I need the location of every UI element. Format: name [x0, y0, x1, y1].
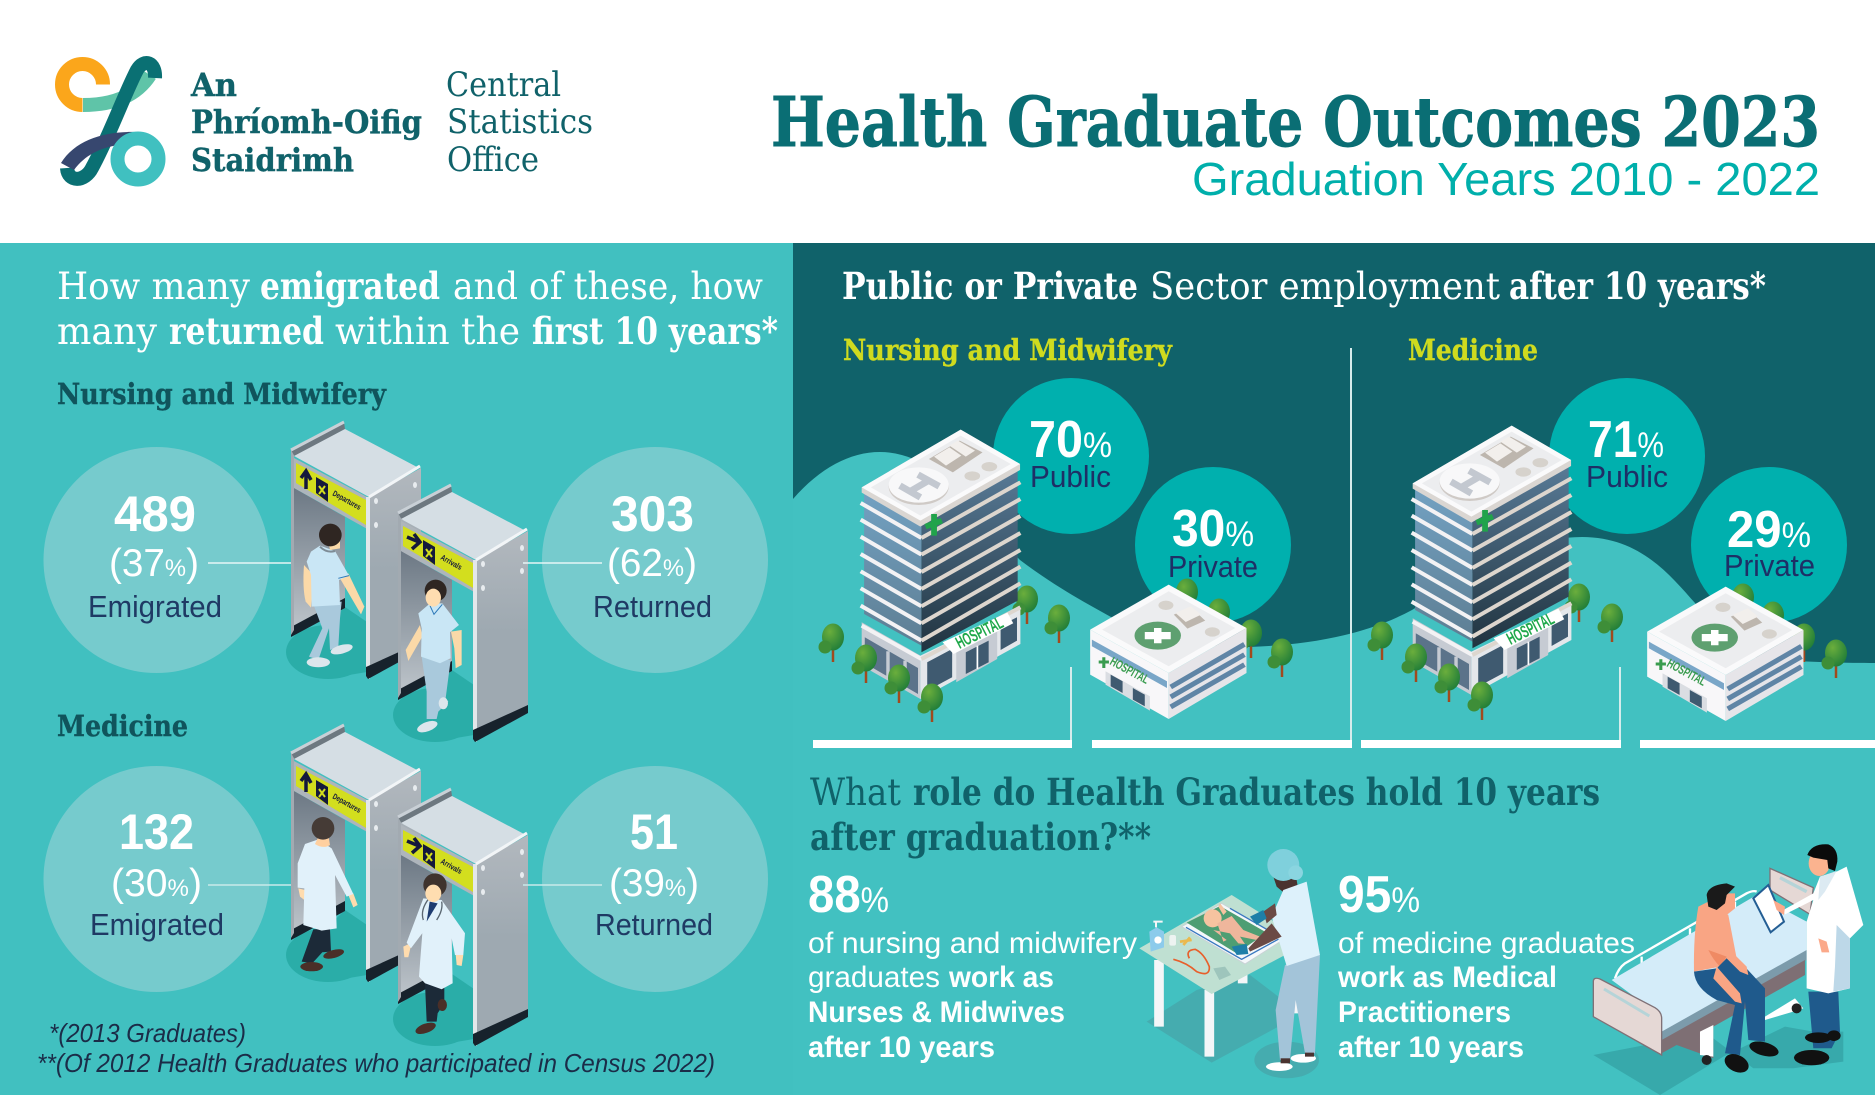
stat: 88% nursing role: Nurses & Midwives	[808, 996, 1065, 1029]
stat: nursing returned: 303	[611, 486, 694, 542]
logo text Irish: Staidrimh	[191, 141, 354, 179]
panel: public or private	[793, 243, 1875, 1095]
heading: roles: role do Health Graduates hold 10 years	[913, 770, 1600, 814]
stat: 95% medicine role: Practitioners	[1338, 996, 1511, 1029]
illustration: nursing private hospital	[1090, 578, 1293, 719]
subheading: nursing and midwifery: Nursing and Midwifery	[57, 377, 387, 411]
stat: 88% nursing role: of nursing and midwifery	[808, 927, 1137, 960]
illustration: doctor with patient on bed	[1593, 844, 1863, 1095]
logo text English: Office	[447, 140, 539, 180]
stat: medicine private: Private	[1724, 548, 1815, 583]
bars and dividers	[1071, 348, 1620, 747]
stat: medicine returned: 51	[630, 804, 678, 860]
figure: doctor arriving	[403, 873, 465, 1036]
stat: medicine public: 71%	[1588, 411, 1664, 469]
stat: medicine emigrated: (30%)	[111, 862, 202, 905]
heading: public or private: Public or Private	[842, 264, 1138, 308]
illustration: nursing arrivals gate: Arrivals	[439, 553, 464, 572]
illustration: nursing hospital tower	[818, 430, 1070, 722]
stat: 95% medicine role	[1337, 866, 1635, 1064]
logo text Irish: Phríomh-Oifig	[191, 103, 422, 141]
stat: 95% medicine role: work as Medical	[1337, 961, 1557, 994]
stat: 88% nursing role: after 10 years	[808, 1031, 995, 1064]
subheading: medicine: Medicine	[57, 709, 188, 743]
stat: 95% medicine role: after 10 years	[1338, 1031, 1524, 1064]
stat: nursing emigrated: 489	[114, 486, 196, 542]
logo mark	[61, 63, 158, 180]
heading: emigration: first 10 years*	[532, 309, 778, 353]
stat: 95% medicine role: of medicine graduates	[1338, 927, 1635, 960]
figure: nurse arriving	[406, 580, 462, 735]
stat: nursing emigrated: Emigrated	[88, 589, 222, 624]
stat: medicine private: 29%	[1727, 501, 1811, 559]
illustration: nursing arrivals gate	[393, 485, 528, 742]
illustration: medicine arrivals gate	[393, 789, 528, 1046]
heading: emigration: How many	[57, 265, 250, 308]
stat: nursing public: Public	[1030, 459, 1111, 494]
stat: nursing public	[993, 378, 1149, 534]
figure: doctor walking away	[298, 817, 358, 971]
stat: medicine returned: Returned	[595, 907, 713, 942]
stat: 88% nursing role: work as	[948, 961, 1054, 994]
heading: emigration: emigrated	[260, 264, 440, 308]
stat: medicine emigrated: Emigrated	[90, 907, 224, 942]
stat: nursing returned	[542, 447, 768, 673]
stat: nursing private	[1135, 467, 1291, 623]
stat: nursing private: Private	[1168, 549, 1258, 584]
illustration: midwife with newborn	[1139, 849, 1320, 1078]
stat: medicine public: Public	[1586, 459, 1668, 494]
stat: nursing emigrated	[44, 447, 270, 673]
stat: nursing public: 70%	[1029, 411, 1112, 469]
stat: nursing returned: Returned	[593, 589, 712, 624]
heading: emigration: and of these, how	[453, 265, 763, 308]
logo text English: Statistics	[447, 102, 593, 142]
illustration: nursing departures gate	[286, 422, 421, 679]
logo text English: Central	[446, 65, 561, 105]
stat: 88% nursing role	[808, 866, 1137, 1064]
heading: emigration: within the	[335, 310, 520, 353]
illustration: medicine arrivals gate: Arrivals	[439, 857, 464, 876]
stat: nursing emigrated: (37%)	[109, 542, 199, 585]
stat: 95% medicine role: 95%	[1338, 866, 1420, 924]
stat: medicine returned	[542, 766, 768, 992]
illustration: medicine departures gate	[286, 725, 421, 982]
footnotes: *(2013 Graduates)	[49, 1018, 246, 1048]
footnotes: **(Of 2012 Health Graduates who participated in Census 2022)	[37, 1048, 715, 1078]
stat: nursing returned: (62%)	[607, 542, 697, 585]
stat: medicine emigrated: 132	[119, 804, 194, 860]
subheading: nursing and midwifery: Nursing and Midwifery	[843, 333, 1173, 367]
heading: public or private: after 10 years*	[1509, 264, 1766, 308]
heading: public or private: Sector employment	[1150, 265, 1500, 308]
logo: Central Statistics Office	[61, 63, 593, 180]
stat: 88% nursing role: graduates	[808, 961, 940, 994]
logo text Irish: An	[190, 66, 237, 104]
illustration: medicine hospital tower	[1368, 426, 1623, 720]
figure: nurse walking away	[303, 524, 364, 667]
subtitle: Graduation Years 2010 - 2022	[1192, 153, 1820, 205]
illustration: nursing departures gate: Departures	[331, 489, 363, 512]
heading: emigration: returned	[169, 309, 324, 353]
panel: emigration	[0, 243, 793, 1095]
stat: medicine private	[1691, 467, 1847, 623]
heading: roles: What	[810, 771, 901, 814]
illustration: medicine private hospital	[1647, 584, 1847, 721]
illustration: medicine departures gate: Departures	[331, 792, 363, 815]
heading: emigration: many	[57, 310, 157, 353]
stat: medicine returned: (39%)	[609, 862, 699, 905]
stat: medicine emigrated	[44, 766, 270, 992]
stat: nursing private: 30%	[1172, 500, 1254, 558]
subheading: medicine: Medicine	[1408, 333, 1538, 367]
stat: medicine public	[1549, 378, 1705, 534]
stat: 88% nursing role: 88%	[808, 866, 889, 924]
heading: roles: after graduation?**	[810, 815, 1151, 859]
